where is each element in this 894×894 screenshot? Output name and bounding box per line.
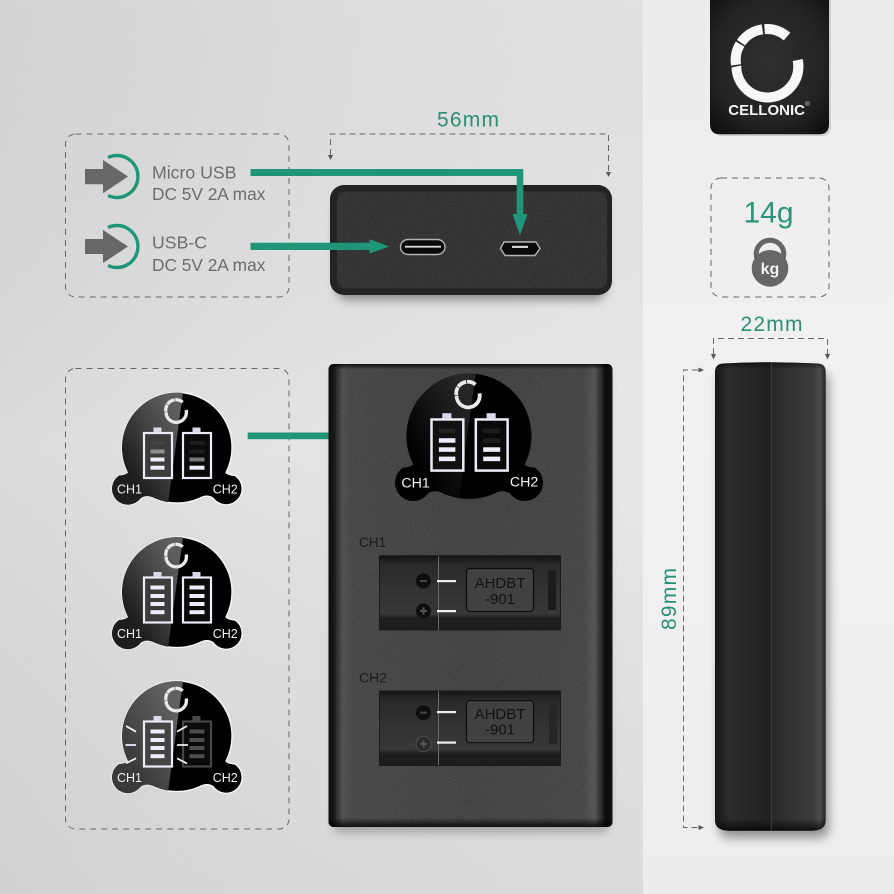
battery slot CH2 bbox=[380, 691, 560, 766]
text: USB-C spec: USB-C bbox=[152, 232, 207, 252]
icon: USB-C input arrow bbox=[85, 225, 138, 268]
arrow: USB-C to port bbox=[250, 239, 390, 254]
device: charger front view bbox=[328, 357, 612, 832]
battery slot CH1: -901 bbox=[485, 591, 515, 608]
panel: LED status badges bbox=[66, 368, 289, 829]
badge: charger LED display bbox=[395, 374, 543, 501]
badge: flashing error state: CH1 bbox=[117, 771, 142, 785]
dimension: 22mm depth bbox=[711, 313, 830, 360]
dimension: 22mm depth: 22mm bbox=[740, 313, 804, 336]
USB-C port bbox=[400, 240, 445, 254]
badge: charger LED display: CH1 bbox=[401, 475, 430, 491]
battery slot CH1: AHDBT bbox=[475, 575, 525, 592]
icon: Cellonic ring bbox=[731, 24, 803, 102]
weight value: 14g bbox=[744, 196, 794, 229]
arrow: Micro USB to port bbox=[250, 169, 528, 236]
text: Micro USB spec: Micro USB bbox=[152, 162, 237, 182]
badge: fully charged state: CH1 bbox=[117, 627, 142, 641]
text: Micro USB spec: DC 5V 2A max bbox=[152, 184, 266, 204]
badge: flashing error state bbox=[111, 680, 243, 794]
badge: charging state: CH2 bbox=[213, 482, 238, 496]
Micro USB port bbox=[500, 242, 540, 256]
logo card bbox=[710, 0, 831, 136]
label: CH1 slot: CH1 bbox=[359, 535, 386, 550]
text: Micro USB spec bbox=[152, 162, 266, 204]
battery slot CH2: AHDBT bbox=[475, 706, 525, 723]
dimension: 89mm height: 89mm bbox=[658, 567, 681, 630]
connector: status panel to charger bbox=[248, 432, 330, 439]
badge: charging state: CH1 bbox=[117, 482, 142, 496]
text: USB-C spec bbox=[152, 232, 266, 275]
dimension: 56mm width bbox=[328, 108, 611, 177]
label: CH2 slot: CH2 bbox=[359, 670, 387, 686]
dimension: 89mm height bbox=[658, 368, 704, 830]
badge: fully charged state bbox=[111, 536, 243, 650]
badge: flashing error state: CH2 bbox=[213, 771, 238, 785]
battery slot CH1 bbox=[380, 556, 560, 630]
panel: input ports bbox=[66, 134, 289, 297]
icon: Micro USB input arrow bbox=[85, 156, 138, 198]
background: left area bbox=[0, 0, 643, 894]
text: USB-C spec: DC 5V 2A max bbox=[152, 255, 266, 275]
badge: charger LED display: CH2 bbox=[510, 474, 538, 490]
icon: kettlebell: kg bbox=[761, 261, 779, 278]
brand name: CELLONIC bbox=[728, 102, 805, 119]
dimension: 56mm width: 56mm bbox=[437, 108, 500, 132]
battery slot CH2: -901 bbox=[485, 722, 515, 738]
background: right column bbox=[643, 0, 894, 894]
device: charger side view bbox=[715, 362, 829, 838]
panel: weight bbox=[711, 178, 829, 297]
device: charger end view with ports bbox=[330, 185, 612, 300]
registered mark: ® bbox=[805, 100, 810, 108]
badge: charging state bbox=[111, 392, 243, 506]
badge: fully charged state: CH2 bbox=[213, 627, 238, 641]
